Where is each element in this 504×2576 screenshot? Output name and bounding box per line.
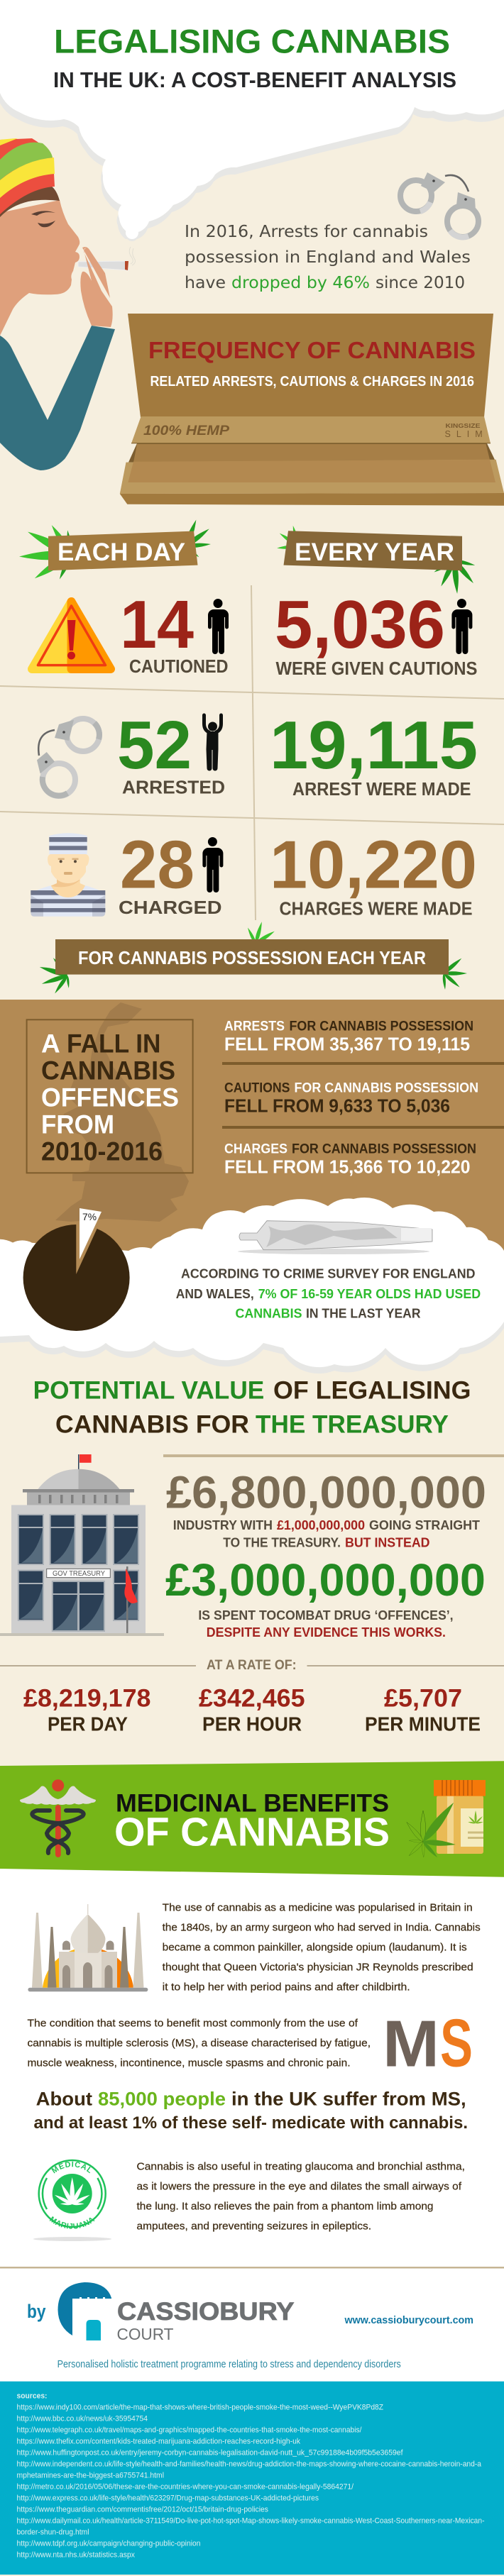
panel box heading: CANNABIS bbox=[41, 1056, 175, 1085]
rate: per day: PER DAY bbox=[48, 1713, 128, 1735]
banner heading: MEDICINAL BENEFITS bbox=[116, 1789, 389, 1817]
banner: for cannabis possession: FOR CANNABIS POSSESSION EACH YEAR bbox=[78, 949, 426, 968]
rate: per minute: PER MINUTE bbox=[365, 1713, 481, 1735]
panel: sources: http://www.tdpf.org.uk/campaign/changing-public-opinion bbox=[17, 2539, 200, 2548]
icon: prisoner bbox=[31, 833, 105, 917]
ribbon: every year bbox=[284, 531, 462, 570]
website: www.cassioburycourt.com bbox=[344, 2314, 473, 2326]
rate: per day bbox=[23, 1684, 150, 1735]
intro text bbox=[185, 223, 471, 292]
intro text: In 2016, Arrests for cannabis bbox=[185, 223, 428, 241]
stat: 3bn spent bbox=[165, 1554, 486, 1640]
callout: 85,000 people: and at least 1% of these self- medicate with cannabis. bbox=[34, 2113, 468, 2133]
stat: 14 cautioned bbox=[120, 587, 229, 677]
icon: medical marijuana badge: MEDICAL bbox=[51, 2161, 91, 2174]
top smoke cloud bbox=[0, 0, 504, 241]
panel: medicinal benefits banner bbox=[0, 1761, 504, 1877]
stat: 5,036 cautions: WERE GIVEN CAUTIONS bbox=[275, 658, 477, 679]
stat: 5,036 cautions: 5,036 bbox=[275, 587, 445, 663]
stat: 3bn spent: IS SPENT TOCOMBAT DRUG ‘OFFENCES’, bbox=[198, 1608, 454, 1623]
stat: 6.8bn industry bbox=[166, 1467, 486, 1549]
paragraph: history: thought that Queen Victoria's physician JR Reynolds prescribed bbox=[163, 1961, 473, 1973]
packet heading: FREQUENCY OF CANNABIS bbox=[148, 338, 476, 364]
map of UK bbox=[55, 1002, 189, 1222]
ribbon: each day bbox=[48, 531, 197, 570]
logo: Cassiobury Court: COURT bbox=[116, 2325, 173, 2343]
paragraph: history: The use of cannabis as a medicine was popularised in Britain in bbox=[163, 1901, 473, 1913]
icon: MS: M bbox=[383, 2007, 439, 2081]
stat: 28 charged: CHARGED bbox=[119, 897, 221, 918]
packet label: 100% HEMP bbox=[143, 424, 229, 438]
stat: cautions fell: FELL FROM 9,633 TO 5,036 bbox=[224, 1095, 450, 1117]
survey text: ACCORDING TO CRIME SURVEY FOR ENGLAND bbox=[181, 1266, 476, 1281]
intro text: dropped by 46% bbox=[231, 274, 370, 292]
stat: 6.8bn industry: BUT INSTEAD bbox=[345, 1535, 430, 1549]
packet slim label: SLIM bbox=[444, 429, 488, 439]
paragraph: glaucoma bbox=[136, 2161, 465, 2233]
packet subheading: RELATED ARRESTS, CAUTIONS & CHARGES IN 2016 bbox=[150, 374, 474, 389]
intro text: have bbox=[185, 274, 226, 292]
banner: for cannabis possession bbox=[55, 939, 449, 975]
stat: 52 arrested bbox=[117, 707, 225, 798]
logo: Cassiobury Court: CASSIOBURY bbox=[117, 2298, 294, 2326]
illustration: person smoking bbox=[0, 138, 135, 470]
rolling paper packet bbox=[120, 314, 504, 506]
callout: 85,000 people: 85,000 people bbox=[98, 2089, 226, 2110]
stat: charges fell: CHARGES bbox=[224, 1142, 287, 1157]
stat: 14 cautioned: 14 bbox=[120, 587, 194, 663]
icon: warning triangle bbox=[32, 602, 111, 669]
tagline: Personalised holistic treatment programme relating to stress and dependency disorders bbox=[57, 2358, 401, 2370]
icon: treasury building: GOV TREASURY bbox=[53, 1569, 105, 1578]
callout: 85,000 people: About bbox=[36, 2089, 92, 2110]
panel: sources: mphetamines-are-the-biggest-a6755741.html bbox=[17, 2471, 164, 2480]
stat: 52 arrested: ARRESTED bbox=[122, 777, 225, 798]
banner heading large: OF CANNABIS bbox=[114, 1810, 390, 1855]
survey text: 7% OF 16-59 YEAR OLDS HAD USED bbox=[258, 1286, 481, 1301]
panel: sources: https://www.theguardian.com/commentisfree/2012/oct/15/britain-drug-policies bbox=[17, 2505, 268, 2514]
stat: 6.8bn industry: £1,000,000,000 bbox=[277, 1518, 365, 1532]
paragraph: multiple sclerosis: muscle weakness, incontinence, muscle spasms and chronic pain. bbox=[27, 2057, 351, 2069]
stat: cautions fell: CAUTIONS bbox=[224, 1080, 290, 1095]
icon: handcuffs bbox=[37, 719, 99, 796]
heading: potential value: THE TREASURY bbox=[256, 1410, 449, 1439]
panel: sources: http://metro.co.uk/2016/05/06/these-are-the-countries-where-you-can-smoke-cannabis-legally-5864271/ bbox=[17, 2482, 354, 2491]
heading: potential value: OF LEGALISING bbox=[273, 1376, 471, 1404]
stat: 6.8bn industry: GOING STRAIGHT bbox=[369, 1518, 481, 1532]
paragraph: history bbox=[163, 1901, 481, 1993]
stat: cautions fell bbox=[224, 1080, 478, 1117]
panel: fall in offences bbox=[0, 1000, 504, 1283]
panel: sources bbox=[0, 2382, 504, 2575]
panel box heading: FALL IN bbox=[67, 1029, 160, 1058]
stat: 6.8bn industry: £6,800,000,000 bbox=[166, 1467, 486, 1518]
stat: 6.8bn industry: TO THE TREASURY. bbox=[223, 1535, 341, 1549]
panel box heading: FROM bbox=[41, 1110, 114, 1139]
panel: sources: http://www.express.co.uk/life-style/health/623297/Drug-map-substances-UK-addicted-pictures bbox=[17, 2494, 319, 2502]
survey text: CANNABIS bbox=[236, 1306, 302, 1321]
icon: joint bbox=[238, 1221, 432, 1254]
packet size label: KINGSIZE bbox=[446, 422, 481, 429]
stat: 19,115 arrests: 19,115 bbox=[270, 707, 478, 783]
pie chart: 7% bbox=[23, 1208, 130, 1331]
panel: sources: http://www.huffingtonpost.co.uk/entry/jeremy-corbyn-cannabis-legalisation-david-nutt_uk_57c99188e4b09f5b5e3659ef bbox=[17, 2448, 403, 2457]
stat: charges fell: FOR CANNABIS POSSESSION bbox=[292, 1142, 476, 1157]
icon: medical marijuana badge bbox=[33, 2160, 111, 2241]
leaves: every year bbox=[277, 525, 476, 594]
survey text: IN THE LAST YEAR bbox=[306, 1306, 420, 1321]
paragraph: multiple sclerosis: cannabis is multiple sclerosis (MS), a disease characterised by fatigue, bbox=[27, 2038, 371, 2050]
panel: sources: http://www.dailymail.co.uk/health/article-3711549/Do-live-pot-hot-spot-Map-shows-likely-smoke-cannabis-West-Coast-Southerners-near-Mexican- bbox=[17, 2516, 485, 2525]
panel: sources: http://www.independent.co.uk/life-style/health-and-families/health-news/drug-addiction-the-maps-showing-where-cocaine-cannabis-heroin-and-a bbox=[17, 2460, 482, 2468]
icon: pill bottle and leaf bbox=[405, 1780, 486, 1859]
icon: medical marijuana badge: MARIJUANA bbox=[50, 2216, 95, 2229]
title: LEGALISING CANNABIS bbox=[54, 23, 450, 61]
survey text bbox=[176, 1266, 481, 1321]
rate: per hour: PER HOUR bbox=[202, 1713, 302, 1735]
paragraph: history: became a common painkiller, alongside opium (laudanum). It is bbox=[163, 1941, 467, 1953]
rate: per day: £8,219,178 bbox=[23, 1684, 150, 1712]
logo: Cassiobury Court: by bbox=[27, 2301, 45, 2322]
paragraph: multiple sclerosis: The condition that seems to benefit most commonly from the use of bbox=[27, 2018, 358, 2030]
panel: sources: http://www.nta.nhs.uk/statistics.aspx bbox=[17, 2550, 135, 2559]
stat: 28 charged: 28 bbox=[120, 827, 195, 903]
subtitle: IN THE UK: A COST-BENEFIT ANALYSIS bbox=[53, 68, 456, 92]
survey text: AND WALES, bbox=[176, 1286, 254, 1301]
leaves: each day bbox=[19, 519, 211, 582]
ribbon: every year: EVERY YEAR bbox=[295, 538, 454, 566]
stat: cautions fell: FOR CANNABIS POSSESSION bbox=[294, 1080, 478, 1095]
panel: sources: https://www.thefix.com/content/kids-treated-marijuana-addiction-reaches-record-high-uk bbox=[17, 2437, 300, 2445]
panel: sources: https://www.indy100.com/article/the-map-that-shows-where-british-people-smoke-the-most-weed--WyePVK8Pd8Z bbox=[17, 2403, 383, 2411]
stat: arrests fell: FELL FROM 35,367 TO 19,115 bbox=[224, 1034, 470, 1055]
heading: potential value: CANNABIS FOR bbox=[55, 1410, 249, 1439]
intro text: since 2010 bbox=[376, 274, 465, 292]
pie chart: 7%: 7% bbox=[82, 1211, 97, 1222]
panel: sources: border-shun-drug.html bbox=[17, 2528, 89, 2536]
leaves: possession bar bbox=[39, 921, 467, 995]
icon: treasury building bbox=[0, 1454, 164, 1636]
icon: MS: S bbox=[440, 2006, 473, 2082]
heading: potential value: POTENTIAL VALUE bbox=[33, 1376, 264, 1404]
panel box heading: OFFENCES bbox=[41, 1083, 179, 1112]
stat: 3bn spent: DESPITE ANY EVIDENCE THIS WORKS. bbox=[207, 1625, 446, 1640]
stat: 10,220 charges: CHARGES WERE MADE bbox=[280, 898, 473, 919]
stat: 6.8bn industry: INDUSTRY WITH bbox=[173, 1518, 273, 1532]
panel box heading: 2010-2016 bbox=[41, 1137, 163, 1166]
paragraph: multiple sclerosis bbox=[27, 2018, 371, 2069]
stat: 28 charged bbox=[119, 827, 223, 918]
rate: per hour: £342,465 bbox=[199, 1684, 305, 1712]
rate divider: AT A RATE OF: bbox=[207, 1657, 297, 1673]
stat: 5,036 cautions bbox=[275, 587, 477, 679]
paragraph: glaucoma: as it lowers the pressure in the eye and dilates the small airways of bbox=[136, 2181, 462, 2193]
paragraph: glaucoma: amputees, and preventing seizures in epileptics. bbox=[136, 2221, 371, 2233]
rate: per minute bbox=[365, 1684, 481, 1735]
paragraph: history: the 1840s, by an army surgeon who had served in India. Cannabis bbox=[163, 1921, 481, 1933]
icon: handcuffs top bbox=[400, 172, 478, 237]
stat: charges fell: FELL FROM 15,366 TO 10,220 bbox=[224, 1156, 470, 1178]
icon: MS bbox=[383, 2006, 473, 2082]
paragraph: history: it to help her with period pains and after childbirth. bbox=[163, 1981, 410, 1993]
stat: 14 cautioned: CAUTIONED bbox=[129, 656, 229, 677]
icon: Taj Mahal bbox=[28, 1904, 148, 1991]
rate: per hour bbox=[199, 1684, 305, 1735]
stat: arrests fell: ARRESTS bbox=[224, 1019, 285, 1034]
panel: sources: sources: bbox=[17, 2392, 47, 2401]
stat: 19,115 arrests: ARREST WERE MADE bbox=[292, 778, 471, 800]
logo: Cassiobury Court bbox=[27, 2282, 294, 2343]
stat: arrests fell bbox=[224, 1019, 473, 1055]
stat: arrests fell: FOR CANNABIS POSSESSION bbox=[290, 1019, 473, 1034]
paragraph: glaucoma: Cannabis is also useful in treating glaucoma and bronchial asthma, bbox=[136, 2161, 465, 2173]
lower smoke cloud bbox=[0, 1198, 504, 1373]
panel box heading: A bbox=[41, 1029, 60, 1058]
callout: 85,000 people: in the UK suffer from MS, bbox=[231, 2089, 466, 2110]
panel box heading bbox=[27, 1019, 193, 1173]
stat: 10,220 charges: 10,220 bbox=[270, 827, 477, 903]
rate: per minute: £5,707 bbox=[384, 1684, 462, 1712]
paragraph: glaucoma: the lung. It also relieves the pain from a phantom limb among bbox=[136, 2201, 433, 2213]
heading: potential value bbox=[33, 1376, 471, 1439]
panel: sources: http://www.telegraph.co.uk/travel/maps-and-graphics/mapped-the-countries-that-smoke-the-most-cannabis/ bbox=[17, 2426, 362, 2434]
icon: caduceus bbox=[20, 1779, 96, 1857]
stat: 3bn spent: £3,000,000,000 bbox=[165, 1554, 486, 1605]
intro text: possession in England and Wales bbox=[185, 248, 471, 267]
callout: 85,000 people bbox=[34, 2089, 468, 2133]
stat: 52 arrested: 52 bbox=[117, 707, 192, 783]
ribbon: each day: EACH DAY bbox=[57, 538, 185, 566]
stat: charges fell bbox=[224, 1142, 476, 1178]
panel: sources: http://www.bbc.co.uk/news/uk-35954754 bbox=[17, 2414, 148, 2423]
